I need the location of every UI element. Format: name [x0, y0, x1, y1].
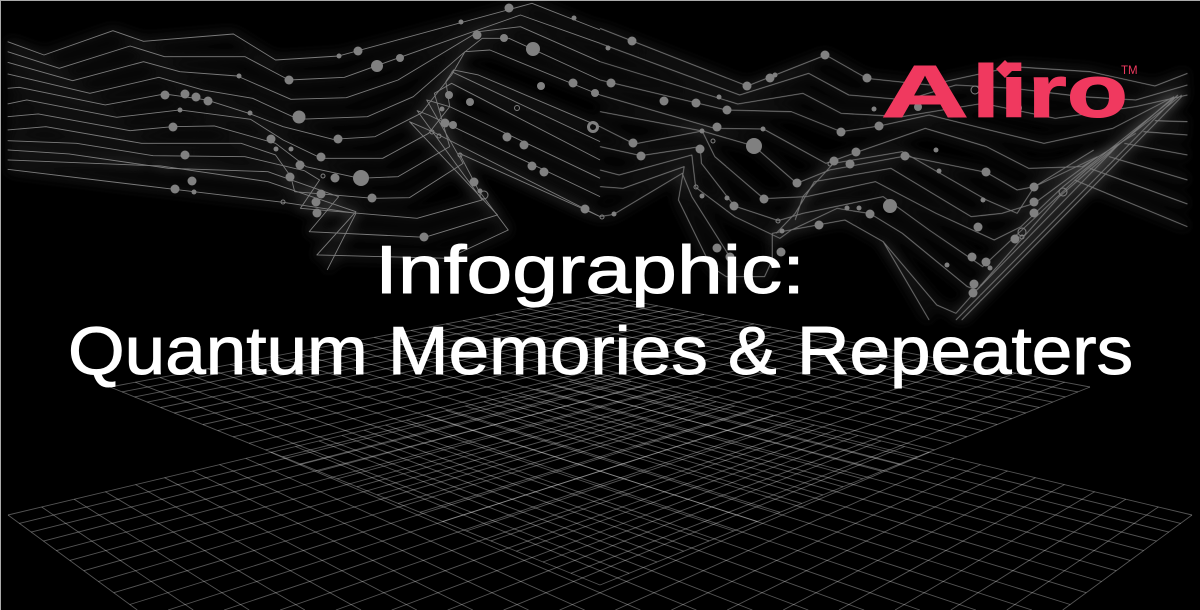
- data dots on waves: [160, 4, 1067, 298]
- logo: Aliro: TM: [1121, 65, 1138, 77]
- logo: Aliro: [881, 50, 1138, 133]
- title: Quantum Memories & Repeaters: [68, 313, 1133, 389]
- wave lines network: [8, 3, 1187, 320]
- logo: Aliro: liro: [972, 50, 1128, 133]
- logo: Aliro: A: [881, 50, 969, 133]
- upper perspective grid: [110, 295, 1090, 585]
- title: Infographic:: [375, 232, 805, 308]
- lower perspective grid: [8, 374, 1192, 610]
- title: [68, 232, 1133, 389]
